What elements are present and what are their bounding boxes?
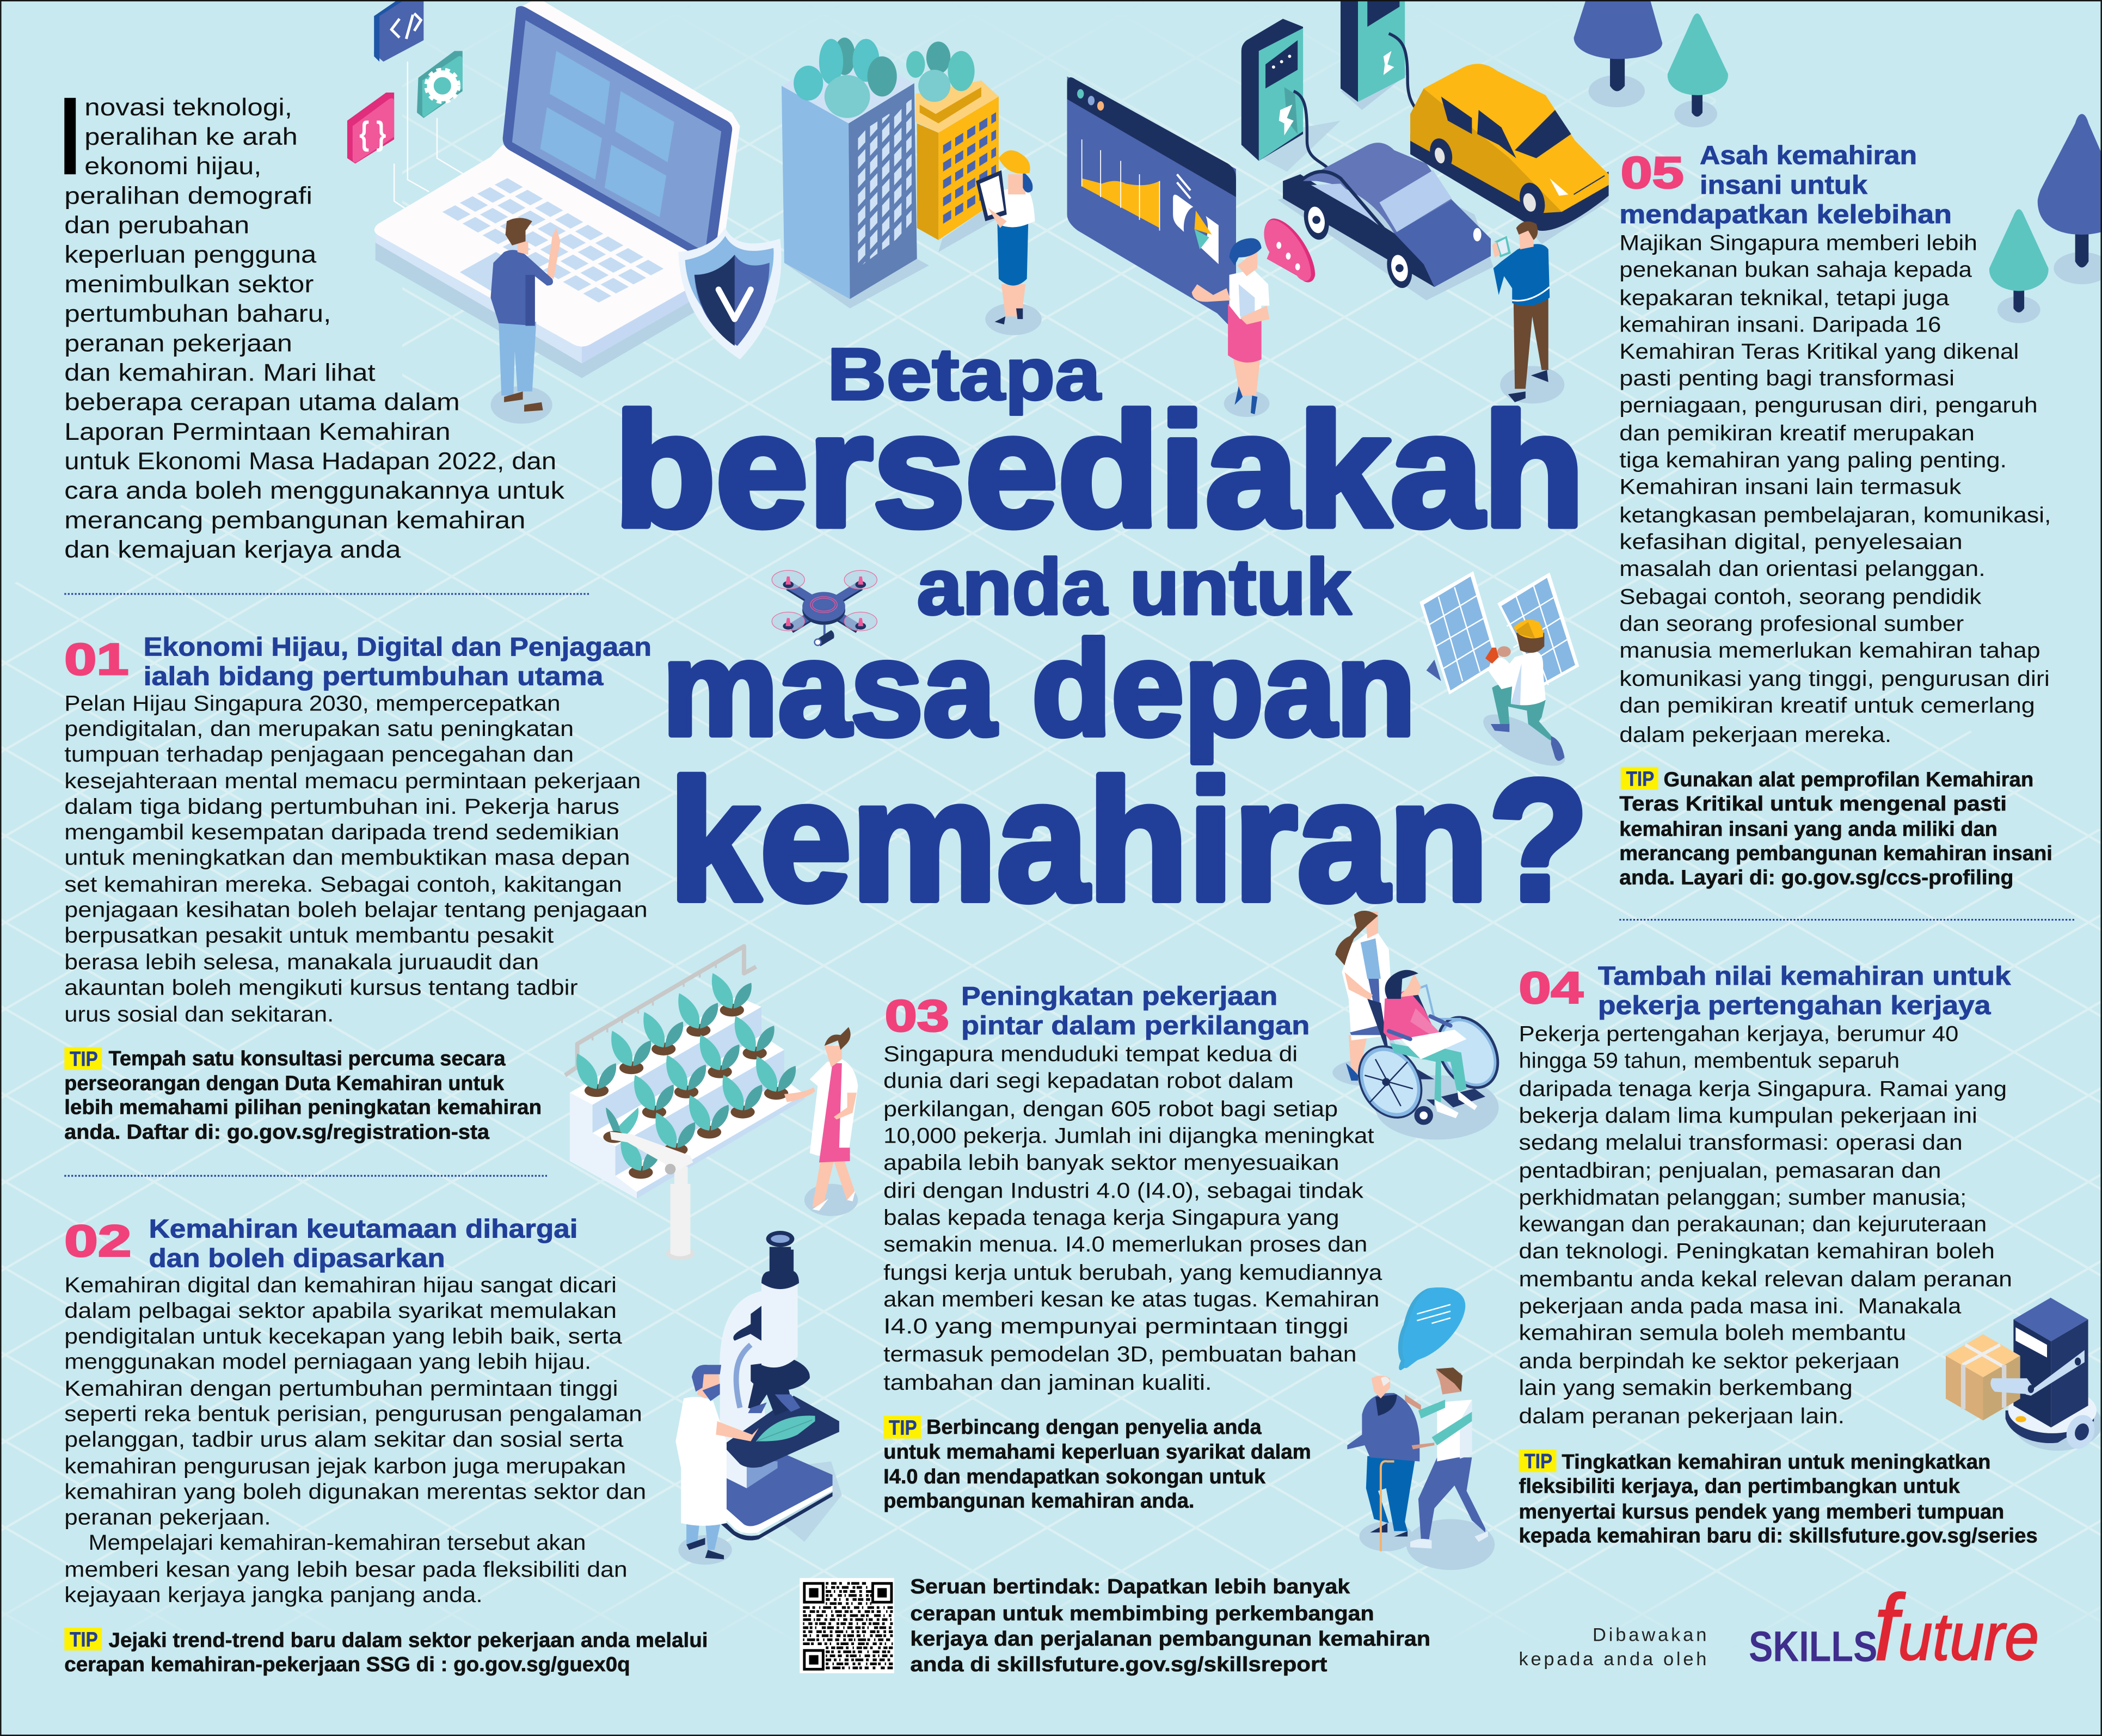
panel: section 05: dan seorang profesional sumber: [1619, 612, 1964, 636]
tip 05: kemahiran insani yang anda miliki dan: [1619, 818, 1997, 841]
intro text with drop cap: peranan pekerjaan: [64, 330, 292, 357]
panel: section 05: manusia memerlukan kemahiran tahap: [1619, 639, 2040, 662]
figure: woman with hard hat and clipboard: [976, 150, 1042, 335]
intro text with drop cap: untuk Ekonomi Masa Hadapan 2022, dan: [64, 448, 556, 475]
tip 03: [883, 1415, 1311, 1513]
tip 05: anda. Layari di: go.gov.sg/ccs-profiling: [1619, 866, 2013, 889]
panel: section 01: mengambil kesempatan daripada trend sedemikian: [64, 820, 619, 844]
illustration: laptop with floating code icons and user: [347, 0, 740, 424]
illustration: elder care with speech bubble: [1347, 1287, 1495, 1570]
robotic arm: [610, 1132, 694, 1260]
intro text with drop cap: [64, 94, 565, 563]
call to action: [910, 1575, 1430, 1676]
panel: section 05: dan pemikiran kreatif untuk cemerlang: [1619, 694, 2035, 717]
illustration: delivery robot with parcel: [1946, 1298, 2102, 1453]
panel: section 02: 02: [64, 1217, 131, 1266]
panel: section 02: kejayaan kerjaya jangka panjang anda.: [64, 1583, 483, 1607]
panel: section 04: hingga 59 tahun, membentuk separuh: [1519, 1049, 1900, 1073]
call to action: anda di skillsfuture.gov.sg/skillsreport: [910, 1653, 1327, 1676]
panel: section 05: penekanan bukan sahaja kepada: [1619, 258, 1972, 282]
panel: section 05: mendapatkan kelebihan: [1619, 200, 1952, 229]
brought to you by: kepada anda oleh: [1519, 1649, 1706, 1670]
panel: section 04: anda berpindah ke sektor pekerjaan: [1519, 1349, 1900, 1373]
illustration: analytics dashboard: [1067, 76, 1236, 324]
panel: section 03: dunia dari segi kepadatan robot dalam: [883, 1069, 1294, 1093]
panel: section 02: peranan pekerjaan.: [64, 1505, 271, 1529]
illustration: hydroponic farm with robotic arm and woman: [565, 946, 858, 1260]
icon: gear: [417, 51, 463, 118]
tip 04: kepada kemahiran baru di: skillsfuture.gov.sg/series: [1519, 1524, 2038, 1548]
figure: man at laptop: [490, 218, 561, 424]
illustration: trees top right: [1574, 0, 2102, 323]
title: masa depan: [662, 614, 1416, 764]
panel: section 03: Peningkatan pekerjaan: [961, 982, 1277, 1011]
panel: section 05: pasti penting bagi transformasi: [1619, 366, 1955, 390]
intro text with drop cap: merancang pembangunan kemahiran: [64, 507, 526, 533]
panel: section 03: termasuk pemodelan 3D, pembuatan bahan: [883, 1342, 1357, 1366]
intro text with drop cap: dan kemahiran. Mari lihat: [64, 359, 376, 386]
panel: section 03: Singapura menduduki tempat kedua di: [883, 1042, 1298, 1066]
icon: code tag cube: [374, 0, 423, 62]
panel: section 04: bekerja dalam lima kumpulan pekerjaan ini: [1519, 1104, 1977, 1128]
panel: section 01: urus sosial dan sekitaran.: [64, 1003, 334, 1027]
panel: section 05: Asah kemahiran: [1700, 142, 1917, 170]
panel: section 02: memberi kesan yang lebih besar pada fleksibiliti dan: [64, 1557, 628, 1581]
panel: section 01: [64, 633, 652, 1144]
tip 01: anda. Daftar di: go.gov.sg/registration-sta: [64, 1120, 490, 1144]
tip 02: Jejaki trend-trend baru dalam sektor pekerjaan anda melalui: [109, 1629, 708, 1652]
patient: [1384, 970, 1477, 1118]
icon: curly braces: { }: [359, 115, 386, 152]
intro text with drop cap: pertumbuhan baharu,: [64, 300, 331, 327]
tip 01: [64, 1047, 542, 1144]
panel: section 01: penjagaan kesihatan boleh belajar tentang penjagaan: [64, 898, 648, 922]
scientist: [675, 1365, 759, 1565]
panel: section 05: [1619, 142, 2052, 889]
plants on rooftops: [794, 38, 975, 118]
illustration: EV chargers: [1241, 0, 1424, 171]
panel: section 04: kemahiran semula boleh membantu: [1519, 1321, 1906, 1345]
panel: section 04: [1519, 962, 2038, 1548]
panel: section 04: lain yang semakin berkembang: [1519, 1376, 1853, 1400]
figure: woman presenting with speech bubble: [1192, 218, 1315, 417]
panel: section 05: Majikan Singapura memberi lebih: [1619, 231, 1977, 255]
panel: section 04: 04: [1519, 963, 1583, 1013]
intro text with drop cap: dan kemajuan kerjaya anda: [64, 537, 401, 563]
figure: man with tablet: [1492, 222, 1564, 403]
intro text with drop cap: keperluan pengguna: [64, 242, 317, 268]
intro text with drop cap: Laporan Permintaan Kemahiran: [64, 419, 451, 445]
QR code: [800, 1578, 894, 1673]
tip 01: lebih memahami pilihan peningkatan kemahiran: [64, 1096, 542, 1119]
call to action: cerapan untuk membimbing perkembangan: [910, 1602, 1374, 1625]
panel: section 04: pekerja pertengahan kerjaya: [1598, 991, 1992, 1020]
panel: section 02: Kemahiran dengan pertumbuhan permintaan tinggi: [64, 1377, 618, 1401]
panel: section 01: berasa lebih selesa, manakala juruaudit dan: [64, 950, 539, 974]
younger carer: [1405, 1367, 1488, 1549]
panel: section 03: I4.0 yang mempunyai permintaan tinggi: [883, 1314, 1349, 1338]
logo: SkillsFuture: [1749, 1575, 2039, 1680]
tip 05: merancang pembangunan kemahiran insani: [1619, 842, 2052, 865]
panel: section 01: set kemahiran mereka. Sebagai contoh, kakitangan: [64, 873, 622, 897]
panel: section 05: kepakaran teknikal, tetapi juga: [1619, 286, 1950, 310]
logo: SkillsFuture: SKILLS: [1749, 1623, 1877, 1671]
panel: section 05: Kemahiran insani lain termasuk: [1619, 475, 1961, 499]
illustration: yellow car: [1410, 64, 1609, 244]
panel: section 01: pendigitalan, dan merupakan satu peningkatan: [64, 717, 574, 741]
title: kemahiran?: [669, 745, 1589, 936]
tip 03: Berbincang dengan penyelia anda: [926, 1415, 1262, 1439]
illustration: drone: [772, 571, 877, 646]
tip 01: perseorangan dengan Duta Kemahiran untuk: [64, 1071, 505, 1095]
illustration: solar panel installer: [1419, 571, 1579, 776]
panel: section 03: tambahan dan jaminan kualiti.: [883, 1371, 1212, 1395]
panel: section 04: dan teknologi. Peningkatan kemahiran boleh: [1519, 1239, 1995, 1263]
panel: section 03: 03: [885, 991, 949, 1041]
panel: section 02: kemahiran pengurusan jejak karbon juga merupakan: [64, 1455, 626, 1479]
tip 04: Tingkatkan kemahiran untuk meningkatkan: [1562, 1450, 1991, 1474]
panel: section 02: seperti reka bentuk perisian, pengurusan pengalaman: [64, 1402, 642, 1426]
panel: section 05: insani untuk: [1700, 171, 1867, 200]
panel: section 02: dan boleh dipasarkan: [149, 1244, 445, 1273]
panel: section 01: dalam tiga bidang pertumbuhan ini. Pekerja harus: [64, 795, 619, 819]
call to action: Seruan bertindak: Dapatkan lebih banyak: [910, 1575, 1350, 1598]
intro text with drop cap: peralihan ke arah: [84, 124, 298, 150]
illustration: blue car: [1277, 143, 1493, 300]
nurse: [1335, 911, 1392, 1081]
panel: section 03: apabila lebih banyak sektor menyesuaikan: [883, 1151, 1339, 1175]
panel: section 01: Ekonomi Hijau, Digital dan Penjagaan: [144, 633, 652, 661]
panel: section 01: 01: [64, 635, 129, 684]
parcel box: [1946, 1334, 2020, 1420]
panel: section 02: kemahiran yang boleh digunakan merentas sektor dan: [64, 1480, 646, 1504]
intro text with drop cap: peralihan demografi: [64, 182, 312, 209]
panel: section 05: komunikasi yang tinggi, pengurusan diri: [1619, 667, 2050, 691]
tip 01: Tempah satu konsultasi percuma secara: [109, 1047, 506, 1070]
tip 04: menyertai kursus pendek yang memberi tumpuan: [1519, 1500, 2004, 1523]
intro text with drop cap: cara anda boleh menggunakannya untuk: [64, 477, 565, 504]
intro text with drop cap: dan perubahan: [64, 212, 249, 239]
panel: section 01: kesejahteraan mental memacu permintaan pekerjaan: [64, 769, 641, 793]
tip 03: TIP: [889, 1416, 917, 1439]
tip 05: Gunakan alat pemprofilan Kemahiran: [1664, 768, 2033, 792]
panel: section 03: perkilangan, dengan 605 robot bagi setiap: [883, 1097, 1338, 1121]
speech bubble: [1398, 1287, 1465, 1370]
intro text with drop cap: beberapa cerapan utama dalam: [64, 389, 460, 416]
panel: section 02: Kemahiran keutamaan dihargai: [149, 1214, 578, 1243]
title: Betapa: [827, 333, 1102, 415]
panel: section 05: dan pemikiran kreatif merupakan: [1619, 421, 1975, 445]
tip 03: I4.0 dan mendapatkan sokongan untuk: [883, 1465, 1266, 1488]
icon: security shield: [678, 228, 782, 359]
illustration: nurse with wheelchair patient: [1332, 911, 1510, 1139]
panel: section 04: perkhidmatan pelanggan; sumber manusia;: [1519, 1186, 1966, 1210]
tip 05: [1619, 767, 2052, 889]
intro text with drop cap: novasi teknologi,: [84, 94, 292, 121]
panel: section 05: perniagaan, pengurusan diri, pengaruh: [1619, 393, 2038, 417]
panel: section 03: akan memberi kesan ke atas tugas. Kemahiran: [883, 1287, 1379, 1311]
illustration: microscope and scientist: [675, 1231, 842, 1565]
panel: section 01: Pelan Hijau Singapura 2030, mempercepatkan: [64, 691, 561, 715]
wheelchair: [1347, 985, 1510, 1129]
panel: section 05: Kemahiran Teras Kritikal yang dikenal: [1619, 340, 2019, 364]
panel: section 05: ketangkasan pembelajaran, komunikasi,: [1619, 503, 2051, 527]
woman in lab coat: [784, 1027, 858, 1216]
panel: section 02: Kemahiran digital dan kemahiran hijau sangat dicari: [64, 1273, 617, 1297]
panel: section 03: diri dengan Industri 4.0 (I4.0), sebagai tindak: [883, 1179, 1363, 1203]
tip 04: fleksibiliti kerjaya, dan pertimbangkan untuk: [1519, 1474, 1960, 1498]
panel: section 02: menggunakan model perniagaan yang lebih hijau.: [64, 1350, 591, 1374]
panel: section 01: ialah bidang pertumbuhan utama: [144, 662, 604, 691]
tip 02: cerapan kemahiran-pekerjaan SSG di : go.gov.sg/guex0q: [64, 1653, 630, 1676]
panel: section 05: tiga kemahiran yang paling penting.: [1619, 448, 2007, 472]
tip 05: Teras Kritikal untuk mengenal pasti: [1619, 792, 2007, 815]
panel: section 01: akauntan boleh mengikuti kursus tentang tadbir: [64, 976, 578, 999]
panel: section 05: dalam pekerjaan mereka.: [1619, 723, 1891, 747]
panel: section 03: [883, 982, 1382, 1513]
panel: section 04: pentadbiran; penjualan, pemasaran dan: [1519, 1159, 1941, 1183]
panel: section 05: 05: [1621, 148, 1684, 198]
title: bersediakah: [614, 379, 1584, 560]
panel: section 04: dalam peranan pekerjaan lain.: [1519, 1404, 1845, 1428]
title: [614, 333, 1589, 936]
illustration: green buildings: [782, 38, 1016, 308]
panel: section 01: untuk meningkatkan dan membuktikan masa depan: [64, 846, 630, 870]
tip 04: TIP: [1524, 1450, 1552, 1473]
brought to you by: Dibawakan: [1593, 1625, 1706, 1646]
tip 04: [1519, 1449, 2038, 1548]
tip 03: pembangunan kemahiran anda.: [883, 1489, 1195, 1513]
intro text with drop cap: ekonomi hijau,: [84, 153, 261, 180]
tip 03: untuk memahami keperluan syarikat dalam: [883, 1440, 1311, 1464]
panel: section 04: pekerjaan anda pada masa ini. Manakala: [1519, 1294, 1962, 1318]
icon: curly braces: [347, 93, 394, 163]
panel: section 04: Pekerja pertengahan kerjaya, berumur 40: [1519, 1022, 1958, 1046]
panel: section 04: membantu anda kekal relevan dalam peranan: [1519, 1267, 2012, 1291]
panel: section 05: masalah dan orientasi pelanggan.: [1619, 557, 1986, 581]
panel: section 02: dalam pelbagai sektor apabila syarikat memulakan: [64, 1299, 617, 1323]
tip 02: TIP: [70, 1628, 98, 1651]
panel: section 03: balas kepada tenaga kerja Singapura yang: [883, 1206, 1339, 1230]
logo: SkillsFuture: future: [1874, 1575, 2039, 1680]
elderly man: [1347, 1376, 1419, 1551]
brought to you by: [1519, 1625, 1706, 1670]
title: anda untuk: [917, 542, 1351, 631]
panel: section 03: fungsi kerja untuk berubah, yang kemudiannya: [883, 1261, 1382, 1285]
panel: section 05: kemahiran insani. Daripada 16: [1619, 313, 1941, 337]
intro text with drop cap: menimbulkan sektor: [64, 271, 314, 298]
panel: section 01: berpusatkan pesakit untuk membantu pesakit: [64, 923, 554, 947]
panel: section 02: Mempelajari kemahiran-kemahiran tersebut akan: [89, 1531, 586, 1555]
panel: section 03: semakin menua. I4.0 memerlukan proses dan: [883, 1232, 1367, 1256]
panel: section 03: pintar dalam perkilangan: [961, 1011, 1310, 1040]
panel: section 04: kewangan dan perakaunan; dan kejuruteraan: [1519, 1212, 1987, 1236]
panel: section 04: sedang melalui transformasi: operasi dan: [1519, 1131, 1963, 1155]
panel: section 02: pendigitalan untuk kecekapan yang lebih baik, serta: [64, 1324, 623, 1348]
call to action: kerjaya dan perjalanan pembangunan kemahiran: [910, 1627, 1430, 1651]
panel: section 05: kefasihan digital, penyelesaian: [1619, 530, 1963, 554]
panel: section 05: Sebagai contoh, seorang pendidik: [1619, 585, 1981, 609]
panel: section 03: 10,000 pekerja. Jumlah ini dijangka meningkat: [883, 1124, 1374, 1148]
panel: section 02: pelanggan, tadbir urus alam sekitar dan sosial serta: [64, 1427, 624, 1451]
tip 05: TIP: [1626, 767, 1654, 790]
panel: section 04: daripada tenaga kerja Singapura. Ramai yang: [1519, 1077, 2007, 1101]
panel: section 02: [64, 1214, 708, 1676]
tip 01: TIP: [70, 1047, 98, 1071]
tip 02: [64, 1628, 708, 1676]
panel: section 04: Tambah nilai kemahiran untuk: [1598, 962, 2011, 991]
panel: section 01: tumpuan terhadap penjagaan pencegahan dan: [64, 743, 574, 766]
